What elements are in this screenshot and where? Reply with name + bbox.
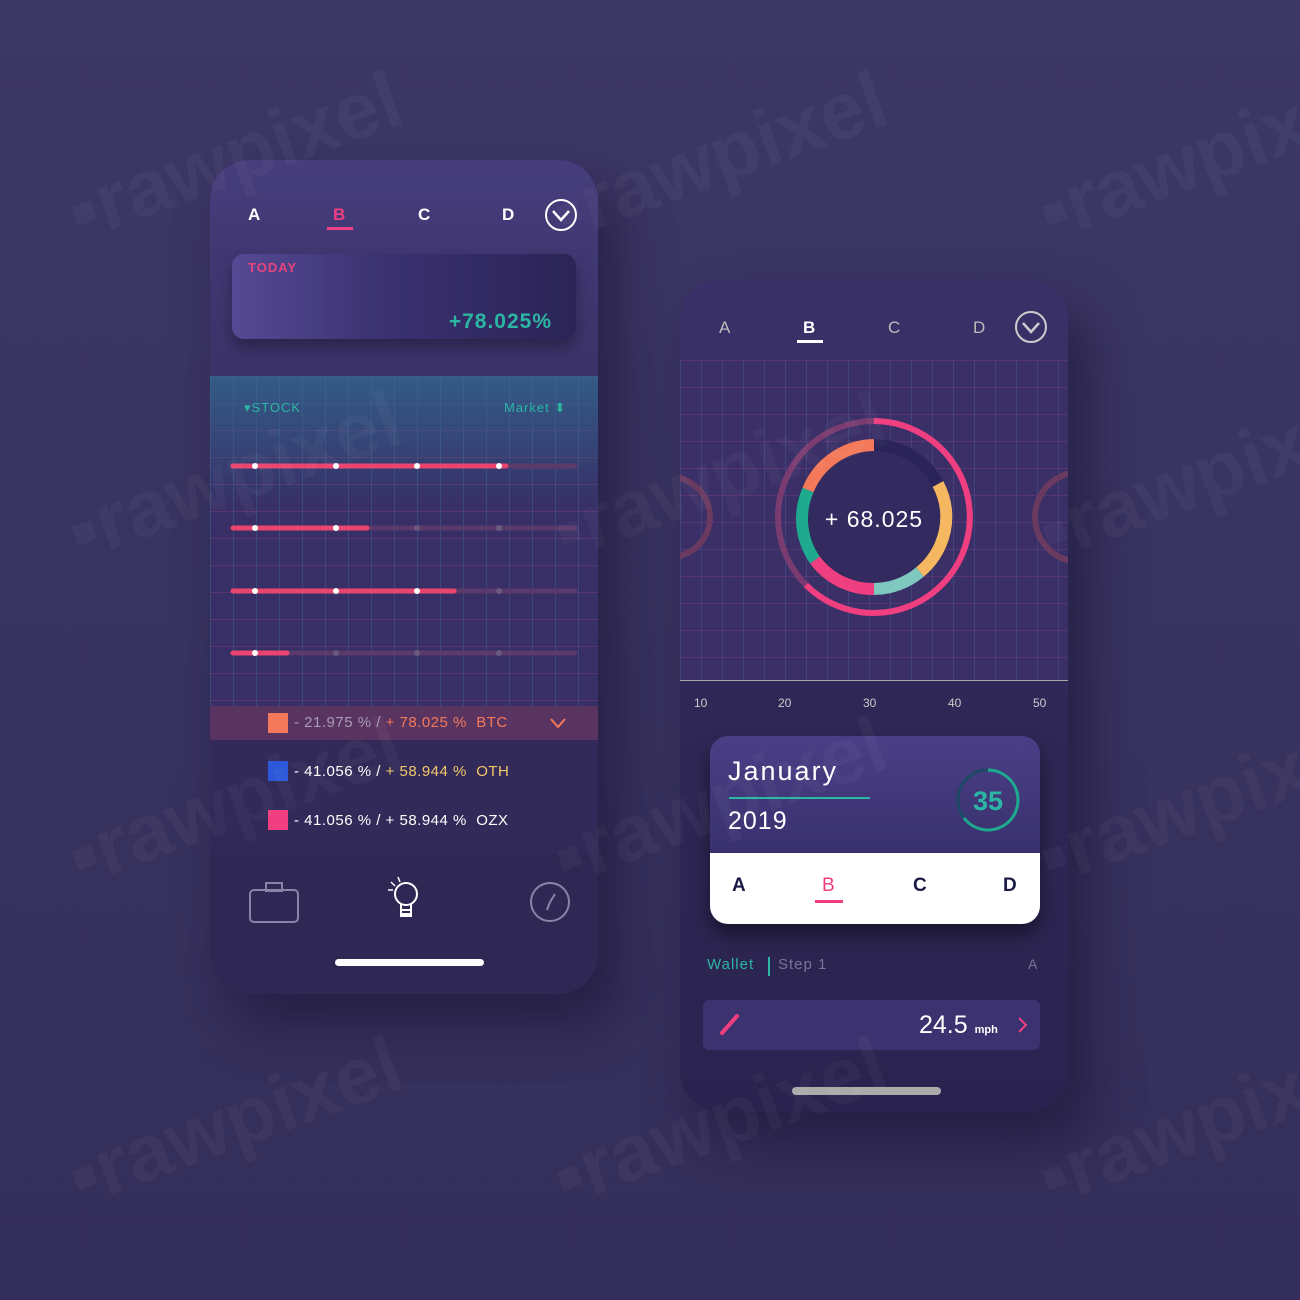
speed field: 24.5 mph (919, 1011, 998, 1039)
watermark: ▪rawpixel (55, 374, 413, 577)
watermark: ▪rawpixel (540, 699, 898, 902)
axis: 20 (778, 696, 791, 710)
axis: 30 (863, 696, 876, 710)
panel: left phone: C (418, 205, 430, 224)
chart: stock bars: ▾STOCK (244, 400, 301, 415)
axis: 10 (694, 696, 707, 710)
wallet row (707, 956, 1038, 976)
bottom nav: left phone (210, 854, 598, 994)
chart: stock bars (210, 376, 598, 706)
axis: 50 (1033, 696, 1046, 710)
axis (680, 680, 1068, 710)
icon: clock (530, 882, 570, 922)
card: january: 35 (973, 786, 1003, 816)
card: today (232, 254, 576, 339)
card: january: January (728, 756, 838, 786)
watermark: ▪rawpixel (540, 1019, 898, 1222)
tabs: left phone (248, 205, 514, 230)
icon: dropdown circle (545, 199, 577, 231)
tabs: right phone: D (973, 318, 985, 337)
icon: bulb (388, 876, 418, 917)
panel: left phone: D (502, 205, 514, 224)
axis: 40 (948, 696, 961, 710)
tabs: right phone: A (719, 318, 730, 337)
watermark: ▪rawpixel (55, 54, 413, 257)
wallet row: Wallet (707, 956, 754, 973)
legend (210, 706, 598, 830)
watermark: ▪rawpixel (55, 699, 413, 902)
icon: briefcase (249, 882, 299, 923)
card: january: 2019 (728, 807, 788, 835)
tabs: right phone (680, 280, 1068, 360)
chart: donut (680, 360, 1068, 680)
watermark: ▪rawpixel (540, 374, 898, 577)
card: january (710, 736, 1040, 924)
watermark: ▪rawpixel (540, 54, 898, 257)
panel: left phone (210, 160, 598, 994)
card: january: D (1003, 875, 1017, 896)
wallet row: Step 1 (778, 956, 827, 973)
panel: left phone: A (248, 205, 260, 224)
chart: stock bars: Market ⬍ (504, 400, 566, 415)
legend: - 41.056 % / + 58.944 % OTH (294, 763, 509, 780)
wallet row: A (1028, 956, 1037, 972)
panel: right phone (680, 280, 1068, 1112)
card: today: TODAY (248, 260, 297, 275)
card: january: C (913, 875, 927, 896)
legend: - 41.056 % / + 58.944 % OZX (294, 812, 509, 829)
chart: donut: + 68.025 (825, 506, 923, 532)
card: january: A (732, 875, 746, 896)
tabs: right phone: B (803, 318, 815, 337)
watermark: ▪rawpixel (55, 1019, 413, 1222)
speed field (703, 1000, 1040, 1050)
card: today: +78.025% (449, 310, 552, 333)
tabs: right phone: C (888, 318, 900, 337)
panel: left phone: B (333, 205, 345, 224)
legend: - 21.975 % / + 78.025 % BTC (294, 714, 508, 731)
card: january: B (822, 875, 835, 896)
